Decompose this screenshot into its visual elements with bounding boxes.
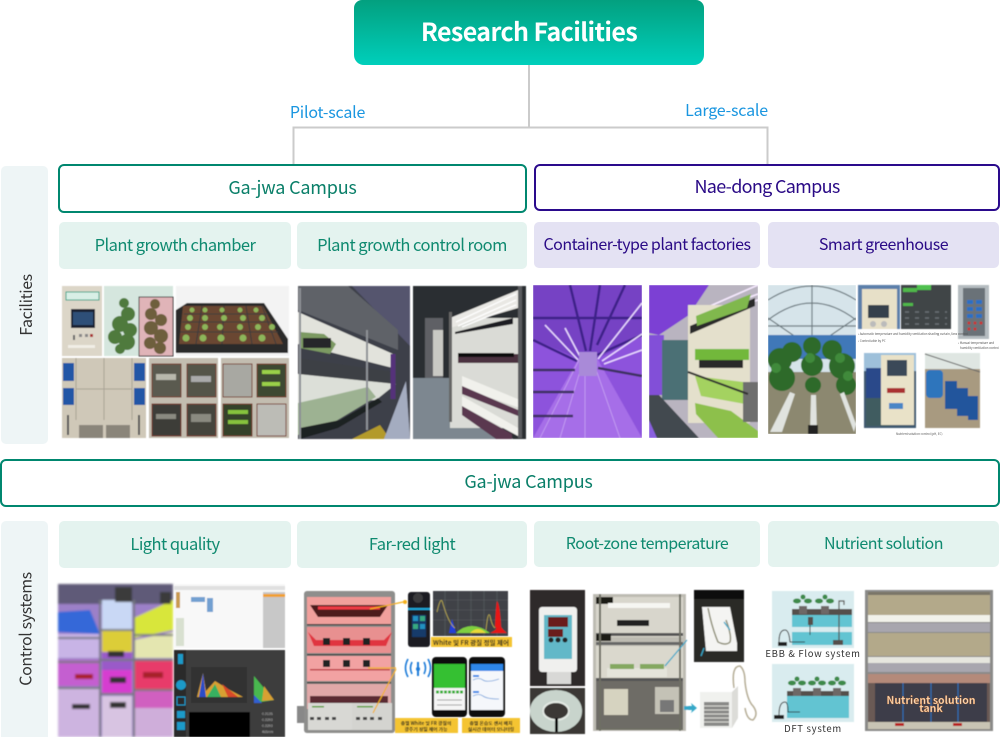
heading: Ga-jwa Campus bbox=[58, 164, 527, 213]
label: pilot-scale: Pilot-scale bbox=[290, 99, 365, 123]
tab: smart greenhouse bbox=[768, 222, 999, 268]
panel label: facilities: Facilities bbox=[12, 274, 36, 336]
panel label: control systems: Control systems bbox=[13, 572, 37, 686]
heading: Ga-jwa Campus control systems: Ga-jwa Campus bbox=[464, 468, 593, 494]
photos: greenhouse controllers bbox=[858, 285, 989, 428]
heading: Nae-dong Campus bbox=[534, 164, 1000, 211]
tab: plant growth control room: Plant growth control room bbox=[317, 232, 507, 256]
tab: nutrient solution bbox=[768, 521, 999, 567]
captions: greenhouse control notes: humidity ventilation control bbox=[960, 346, 999, 350]
label: nutrient solution tank bbox=[886, 693, 976, 716]
tab: root-zone temperature: Root-zone temperature bbox=[566, 530, 728, 554]
heading: Nae-dong Campus: Nae-dong Campus bbox=[694, 172, 840, 198]
photos: light quality software: 0.3135 bbox=[262, 712, 273, 717]
title bbox=[354, 0, 704, 65]
photos: plant growth control room bbox=[298, 286, 526, 439]
photo: container-type plant factory shelves bbox=[649, 285, 758, 438]
photos: root-zone temperature bbox=[530, 590, 756, 734]
heading: Ga-jwa Campus control systems bbox=[0, 459, 1000, 507]
tab: light quality bbox=[59, 521, 291, 568]
tab: plant growth chamber: Plant growth chamber bbox=[95, 232, 255, 256]
photo: container-type plant factory interior bbox=[533, 285, 642, 438]
tab: container-type plant factories bbox=[534, 222, 760, 268]
photos: far-red light control: 층별 온습도 센서 배치 bbox=[470, 720, 512, 727]
captions: greenhouse control notes: • Manual temperature and bbox=[958, 341, 994, 345]
captions: greenhouse control notes: • Controllable by PC bbox=[858, 339, 886, 343]
label: large-scale: Large-scale bbox=[685, 97, 768, 121]
panel label: facilities bbox=[1, 166, 48, 444]
photos: nutrient solution systems bbox=[772, 590, 993, 731]
tab: nutrient solution: Nutrient solution bbox=[824, 530, 943, 554]
photos: light quality software: 465nm bbox=[262, 730, 273, 735]
label: nutrient solution tank: Nutrient solution bbox=[886, 693, 976, 708]
tab: far-red light: Far-red light bbox=[369, 530, 455, 554]
photos: light quality software: 0.3293 bbox=[262, 718, 273, 723]
label: DFT system: DFT system bbox=[784, 721, 842, 735]
label: nutrient solution tank: tank bbox=[919, 701, 943, 716]
tab: root-zone temperature bbox=[534, 521, 760, 567]
connector: hierarchy lines bbox=[292, 65, 768, 164]
title: Research Facilities bbox=[421, 12, 637, 48]
photos: far-red light control: 광주기 정밀 제어 가능 bbox=[404, 726, 448, 733]
label: EBB and flow: EBB & Flow system bbox=[765, 646, 861, 660]
photos: light quality software: 0.3293 bbox=[262, 724, 273, 729]
photos: far-red light control: 층별 White 및 FR 광질의 bbox=[401, 720, 451, 727]
tab: plant growth chamber bbox=[59, 222, 291, 269]
tab: smart greenhouse: Smart greenhouse bbox=[819, 230, 948, 254]
photos: plant growth chamber bbox=[62, 286, 289, 438]
tab: light quality: Light quality bbox=[130, 530, 220, 554]
panel label: control systems bbox=[1, 521, 48, 737]
captions: greenhouse control notes: Nutrient solution control (pH, EC) bbox=[896, 432, 943, 436]
photos: far-red light control bbox=[297, 591, 520, 733]
heading: Ga-jwa Campus: Ga-jwa Campus bbox=[228, 174, 357, 200]
photos: far-red light control: 실시간 데이터 모니터링 bbox=[468, 726, 514, 733]
captions: greenhouse control notes: • Automatic temperature and humidity ventilation shading curtain, fans control bbox=[858, 332, 968, 336]
photos: far-red light control: White 및 FR 광질 정밀 제어 bbox=[433, 637, 509, 647]
photos: light quality software bbox=[174, 584, 285, 737]
photo: light quality LED rack bbox=[58, 584, 173, 737]
captions: greenhouse control notes bbox=[858, 332, 999, 436]
photo: smart greenhouse bbox=[768, 285, 856, 434]
tab: plant growth control room bbox=[297, 222, 527, 269]
tab: container-type plant factories: Container-type plant factories bbox=[543, 230, 751, 254]
tab: far-red light bbox=[297, 521, 527, 568]
photo collage bbox=[56, 284, 999, 737]
